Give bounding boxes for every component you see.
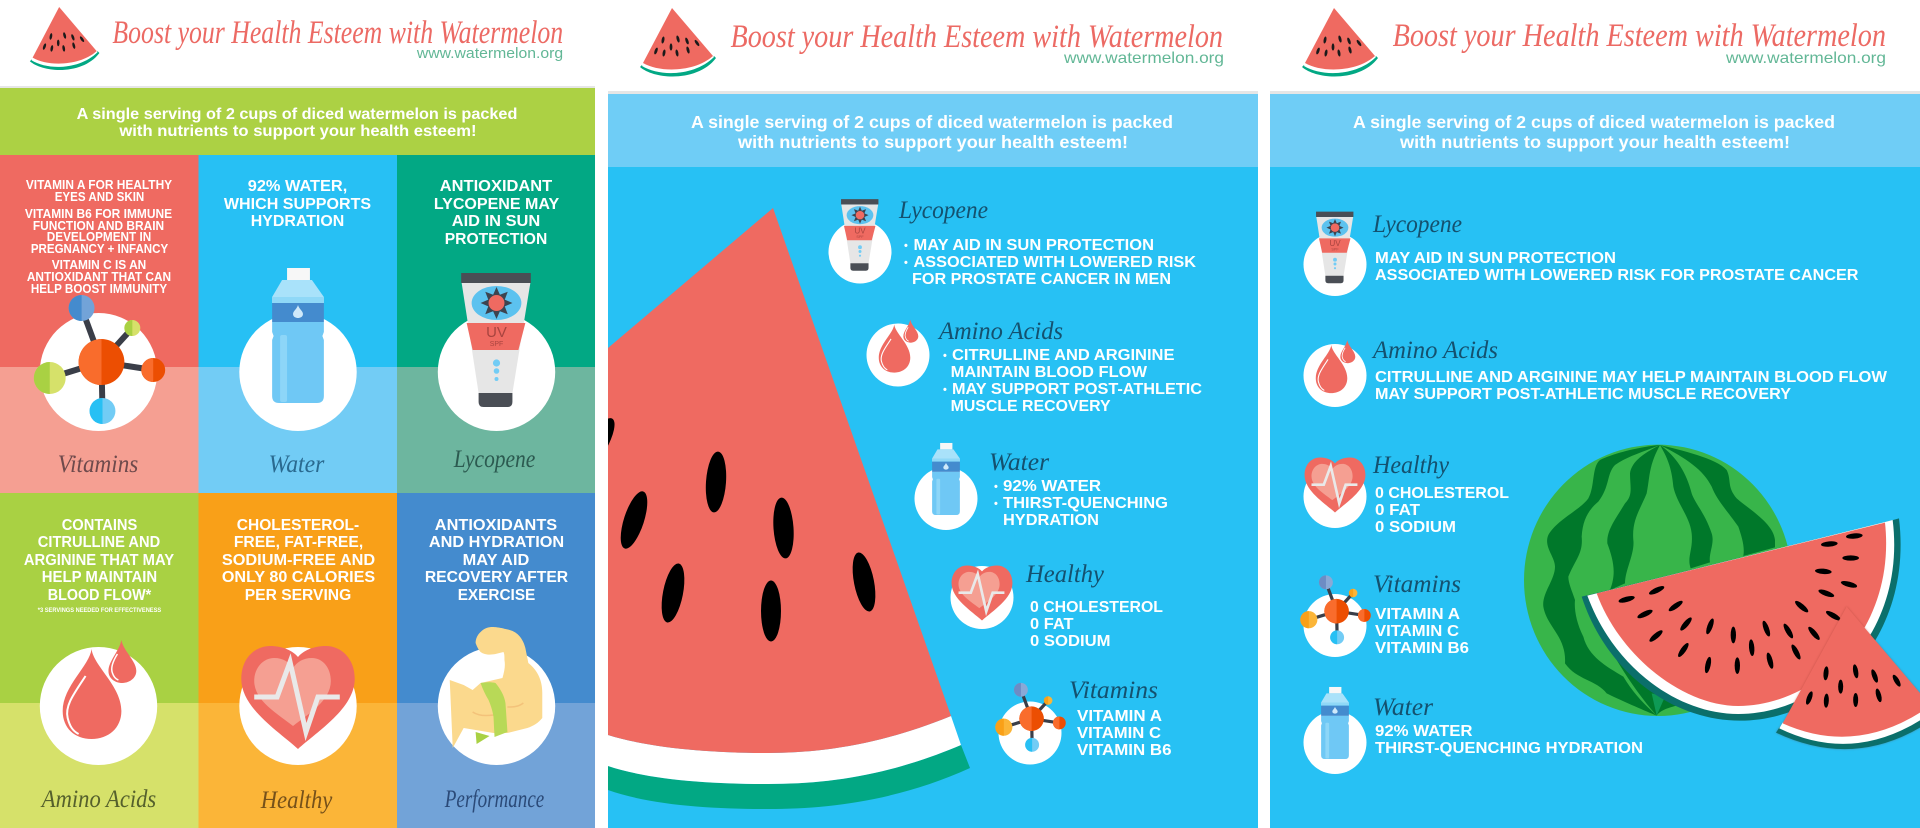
cell: vitamins: PREGNANCY + INFANCY: [31, 241, 168, 256]
cell: amino acids: ARGININE THAT MAY: [24, 552, 175, 569]
title: Boost your Health Esteem with Watermelon: [730, 19, 1223, 55]
cell: vitamins: VITAMIN A FOR HEALTHY: [26, 177, 172, 192]
item: water: 92% WATER: [1375, 723, 1472, 740]
item: amino acids: MAINTAIN BLOOD FLOW: [951, 364, 1147, 381]
cell: performance: AND HYDRATION: [429, 534, 564, 551]
cell: healthy: FREE, FAT-FREE,: [234, 534, 363, 551]
cell: amino acids: [0, 493, 199, 828]
cell: amino acids: CITRULLINE AND: [38, 534, 160, 551]
item: water: THIRST-QUENCHING: [1003, 495, 1168, 512]
item: amino acids: CITRULLINE AND ARGININE MAY HELP MAINTAIN BLOOD FLOW: [1375, 369, 1887, 386]
item: vitamins: [995, 677, 1172, 764]
cell: vitamins: FUNCTION AND BRAIN: [33, 218, 164, 233]
item: vitamins: VITAMIN C: [1077, 725, 1161, 742]
item: vitamins: VITAMIN A: [1077, 708, 1162, 725]
item: healthy: 0 FAT: [1030, 616, 1074, 633]
cell: lycopene: LYCOPENE MAY: [434, 196, 560, 213]
icon: watermelon slice logo: [1302, 8, 1378, 77]
item: healthy: Healthy: [1025, 561, 1105, 588]
cell: vitamins: [0, 155, 199, 493]
cell: water: 92% WATER,: [248, 178, 347, 195]
item: lycopene: Lycopene: [1372, 211, 1462, 238]
cell: performance: [397, 493, 595, 828]
item: vitamins: Vitamins: [1069, 677, 1158, 704]
item: lycopene: MAY AID IN SUN PROTECTION: [1375, 250, 1616, 267]
intro band: A single serving of 2 cups of diced watermelon is packed: [1353, 112, 1835, 132]
item: healthy: [1304, 452, 1509, 536]
whole watermelon: [1524, 445, 1792, 716]
item: water: Water: [989, 449, 1049, 476]
item: water: [914, 443, 1168, 530]
item: amino acids: MUSCLE RECOVERY: [951, 398, 1111, 415]
cell: amino acids: *3 SERVINGS NEEDED FOR EFFECTIVENESS: [38, 607, 162, 614]
cell: healthy: [199, 493, 397, 828]
cell: healthy: SODIUM-FREE AND: [222, 552, 375, 569]
cell: amino acids: Amino Acids: [40, 786, 156, 813]
cell: lycopene: ANTIOXIDANT: [440, 178, 553, 195]
website url: www.watermelon.org: [1063, 50, 1224, 67]
cell: performance: Performance: [444, 786, 544, 813]
half slice: [1582, 518, 1901, 721]
cell: healthy: CHOLESTEROL-: [237, 517, 359, 534]
cell: water: WHICH SUPPORTS: [224, 196, 371, 213]
item: lycopene: [828, 197, 1197, 288]
panel: whole watermelon list infographic: [1270, 8, 1920, 828]
cell: healthy: Healthy: [260, 787, 333, 814]
item: water: 92% WATER: [1003, 478, 1101, 495]
item: vitamins: [1300, 571, 1469, 657]
cell: water: HYDRATION: [251, 213, 344, 230]
title: Boost your Health Esteem with Watermelon: [112, 15, 563, 51]
item: healthy: 0 FAT: [1375, 502, 1421, 519]
cell: vitamins: DEVELOPMENT IN: [47, 229, 151, 244]
item: amino acids: MAY SUPPORT POST-ATHLETIC MUSCLE RECOVERY: [1375, 386, 1792, 403]
cell: vitamins: VITAMIN B6 FOR IMMUNE: [25, 206, 172, 221]
item: healthy: Healthy: [1372, 452, 1450, 479]
cell: performance: EXERCISE: [458, 587, 535, 604]
cell: lycopene: [397, 155, 595, 493]
item: amino acids: Amino Acids: [937, 318, 1063, 345]
cell: healthy: PER SERVING: [245, 587, 351, 604]
item: lycopene: ASSOCIATED WITH LOWERED RISK: [914, 254, 1197, 271]
intro band: A single serving of 2 cups of diced watermelon is packed: [691, 112, 1173, 132]
item: amino acids: •: [943, 384, 947, 396]
cell: vitamins: ANTIOXIDANT THAT CAN: [27, 269, 171, 284]
item: healthy: [950, 561, 1163, 650]
cell: amino acids: CONTAINS: [62, 517, 137, 534]
item: amino acids: MAY SUPPORT POST-ATHLETIC: [952, 381, 1202, 398]
icon: watermelon slice logo: [30, 7, 99, 70]
panel: watermelon slice list infographic: [573, 8, 1258, 828]
item: amino acids: [1304, 337, 1887, 407]
illustration: whole watermelon with slices: [1524, 445, 1920, 749]
item: water: HYDRATION: [1003, 512, 1099, 529]
illustration: large watermelon slice: [573, 208, 970, 809]
intro band: [1270, 94, 1920, 167]
intro band: [0, 88, 595, 155]
cell: amino acids: BLOOD FLOW*: [48, 587, 151, 604]
item: amino acids: •: [943, 350, 947, 362]
header: panel 1: [30, 7, 563, 70]
cell: water: Water: [269, 451, 325, 478]
cell: vitamins: HELP BOOST IMMUNITY: [31, 281, 167, 296]
cell: performance: RECOVERY AFTER: [425, 569, 568, 586]
item: water: •: [994, 498, 998, 510]
cell: water: [199, 155, 397, 493]
intro band: [608, 94, 1258, 167]
website url: www.watermelon.org: [1725, 50, 1886, 67]
cell: performance: MAY AID: [463, 552, 529, 569]
cell: amino acids: HELP MAINTAIN: [42, 569, 157, 586]
item: water: Water: [1373, 694, 1433, 721]
intro band: with nutrients to support your health esteem!: [737, 132, 1128, 152]
cell: healthy: ONLY 80 CALORIES: [222, 569, 375, 586]
panel: nutrient grid infographic: [0, 7, 595, 828]
item: healthy: 0 CHOLESTEROL: [1375, 485, 1509, 502]
item: vitamins: VITAMIN C: [1375, 623, 1459, 640]
cell: performance: ANTIOXIDANTS: [435, 517, 557, 534]
intro band: with nutrients to support your health esteem!: [1399, 132, 1790, 152]
header: panel 3: [1302, 8, 1886, 77]
cell: lycopene: Lycopene: [453, 446, 535, 473]
item: lycopene: •: [904, 240, 908, 252]
item: vitamins: VITAMIN A: [1375, 606, 1460, 623]
item: healthy: 0 SODIUM: [1375, 519, 1456, 536]
item: water: THIRST-QUENCHING HYDRATION: [1375, 740, 1643, 757]
item: amino acids: [866, 318, 1202, 415]
item: healthy: 0 SODIUM: [1030, 633, 1110, 650]
cell: vitamins: EYES AND SKIN: [55, 189, 144, 204]
intro band: with nutrients to support your health esteem!: [118, 123, 477, 140]
item: vitamins: Vitamins: [1373, 571, 1461, 598]
item: water: [1304, 687, 1643, 774]
icon: watermelon slice logo: [640, 8, 716, 77]
item: vitamins: VITAMIN B6: [1375, 640, 1469, 657]
small slice: [1776, 607, 1920, 749]
item: lycopene: [1304, 211, 1858, 296]
intro band: A single serving of 2 cups of diced watermelon is packed: [77, 106, 517, 123]
item: water: •: [994, 481, 998, 493]
item: lycopene: •: [904, 257, 908, 269]
website url: www.watermelon.org: [416, 45, 563, 62]
cell: vitamins: VITAMIN C IS AN: [52, 257, 146, 272]
item: lycopene: Lycopene: [898, 197, 988, 224]
item: lycopene: FOR PROSTATE CANCER IN MEN: [912, 271, 1171, 288]
header: panel 2: [640, 8, 1224, 77]
item: healthy: 0 CHOLESTEROL: [1030, 599, 1163, 616]
cell: lycopene: AID IN SUN: [452, 213, 540, 230]
item: vitamins: VITAMIN B6: [1077, 742, 1172, 759]
item: amino acids: Amino Acids: [1371, 337, 1498, 364]
item: amino acids: CITRULLINE AND ARGININE: [952, 347, 1174, 364]
item: lycopene: MAY AID IN SUN PROTECTION: [914, 237, 1154, 254]
cell: lycopene: PROTECTION: [445, 231, 547, 248]
item: lycopene: ASSOCIATED WITH LOWERED RISK FOR PROSTATE CANCER: [1375, 267, 1858, 284]
cell: vitamins: Vitamins: [58, 451, 138, 478]
